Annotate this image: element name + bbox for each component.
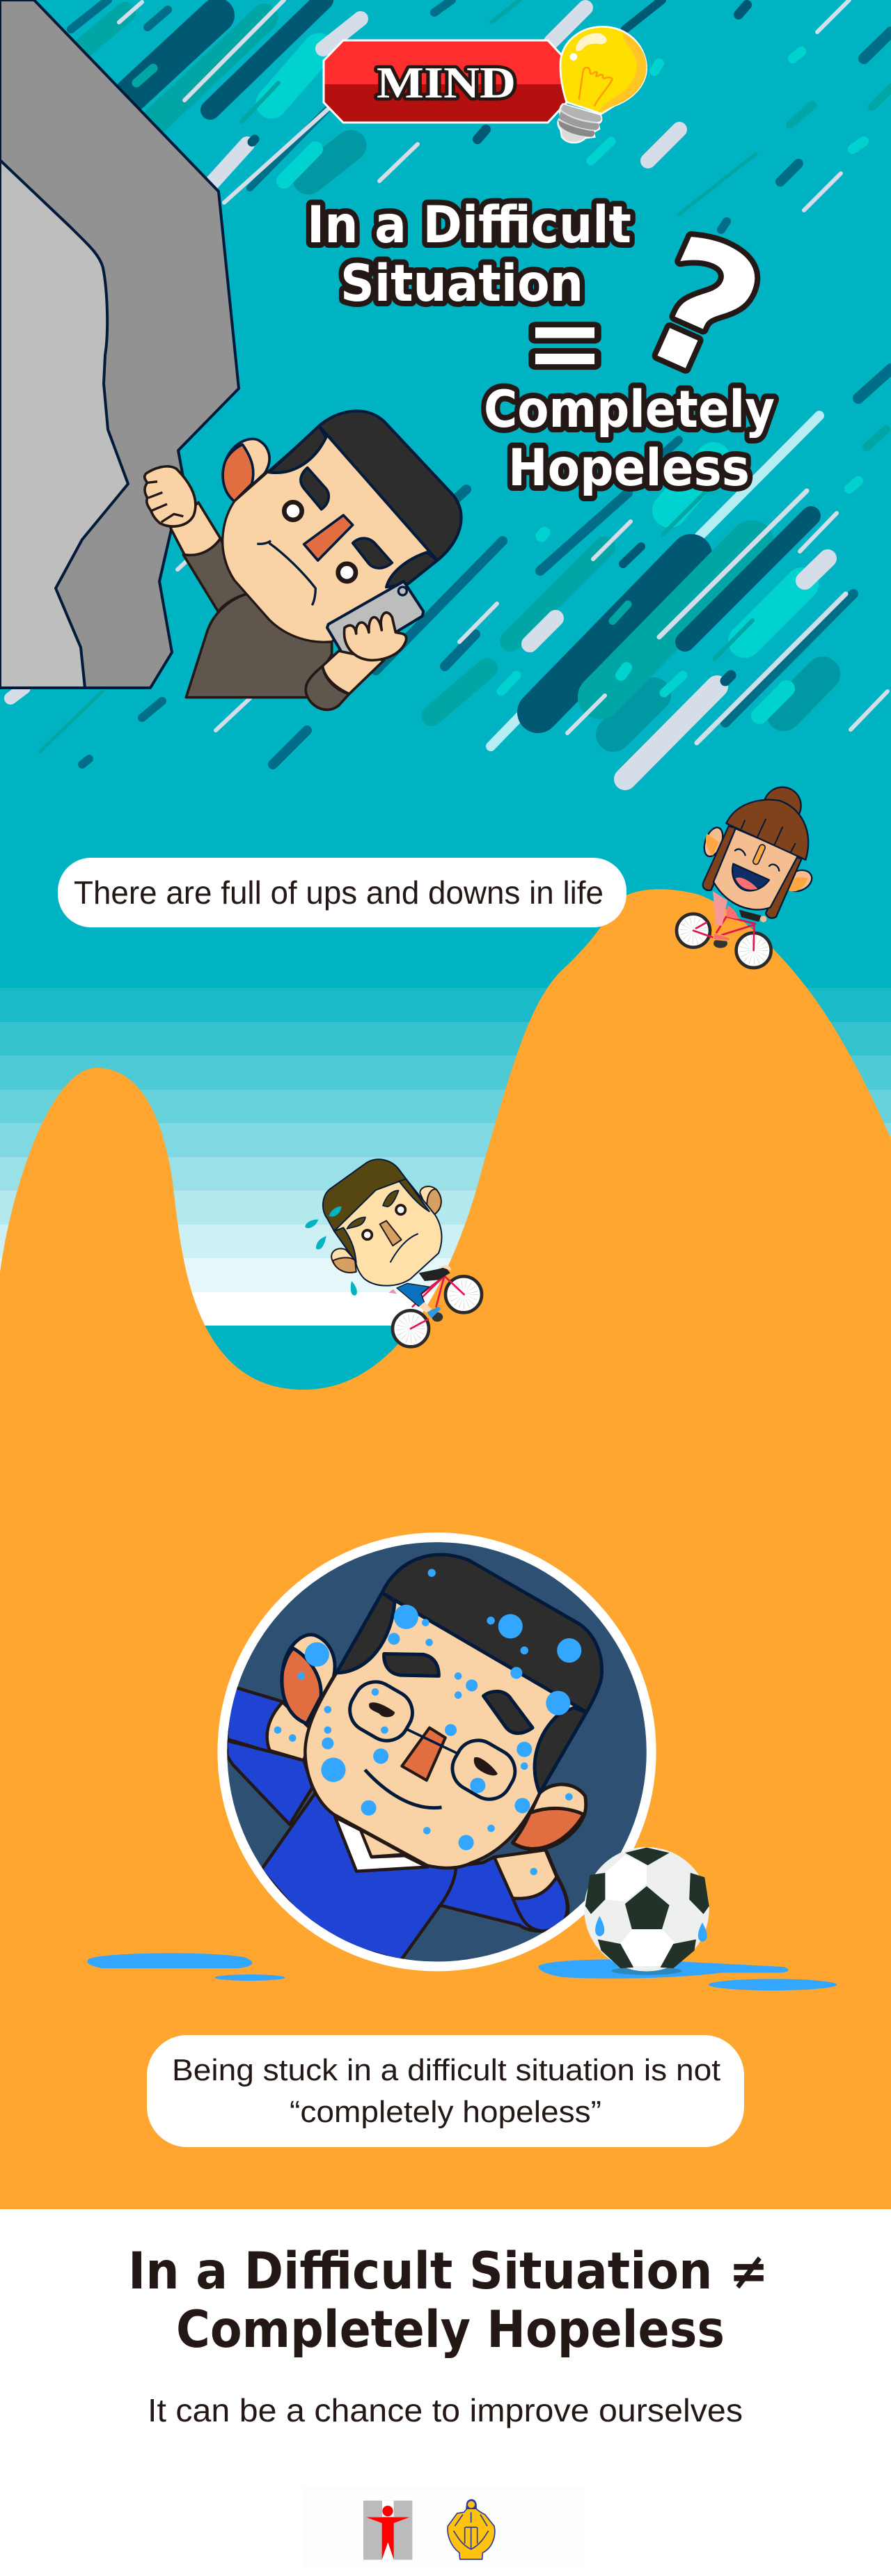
character: worried man on bike <box>305 1159 482 1346</box>
logo: yellow hands <box>448 2499 495 2559</box>
title: In a Difficult Situation = Completely Hopeless <box>307 196 775 498</box>
sweat drops <box>274 1569 581 1875</box>
title: In a Difficult Situation = Completely Hopeless: = <box>530 290 599 399</box>
footer logo strip <box>303 2487 586 2569</box>
character: happy girl on bike <box>677 787 815 968</box>
logo: red figure <box>363 2501 412 2560</box>
conclusion heading: Completely Hopeless <box>176 2300 725 2359</box>
title: In a Difficult Situation = Completely Hopeless: Hopeless <box>508 439 750 498</box>
banner: MIND: MIND <box>377 58 516 107</box>
diagonal rain streak background <box>10 0 891 779</box>
circular portrait: sweating man with glasses <box>217 1532 656 1971</box>
icon: soccer ball <box>584 1847 709 1975</box>
water puddles <box>87 1953 837 1990</box>
sky gradient bands <box>0 988 891 1326</box>
conclusion heading: In a Difficult Situation ≠ <box>128 2242 768 2301</box>
callout: not completely hopeless <box>147 2035 744 2147</box>
subheading: It can be a chance to improve ourselves <box>148 2392 743 2428</box>
big question mark: ? <box>614 196 789 422</box>
banner: MIND <box>324 40 567 123</box>
callout: ups and downs <box>58 858 626 927</box>
callout: not completely hopeless: “completely hopeless” <box>290 2095 601 2129</box>
orange hills <box>0 889 891 2209</box>
icon: light bulb <box>558 26 647 143</box>
title: In a Difficult Situation = Completely Hopeless: In a Difficult <box>307 196 631 255</box>
callout: ups and downs: There are full of ups and downs in life <box>74 874 604 911</box>
rock cliff <box>0 0 239 688</box>
callout: not completely hopeless: Being stuck in a difficult situation is not <box>172 2053 720 2087</box>
man clinging to cliff holding phone <box>145 411 462 709</box>
title: In a Difficult Situation = Completely Hopeless: Situation <box>340 254 583 313</box>
conclusion heading <box>128 2242 768 2359</box>
title: In a Difficult Situation = Completely Hopeless: Completely <box>484 380 775 439</box>
